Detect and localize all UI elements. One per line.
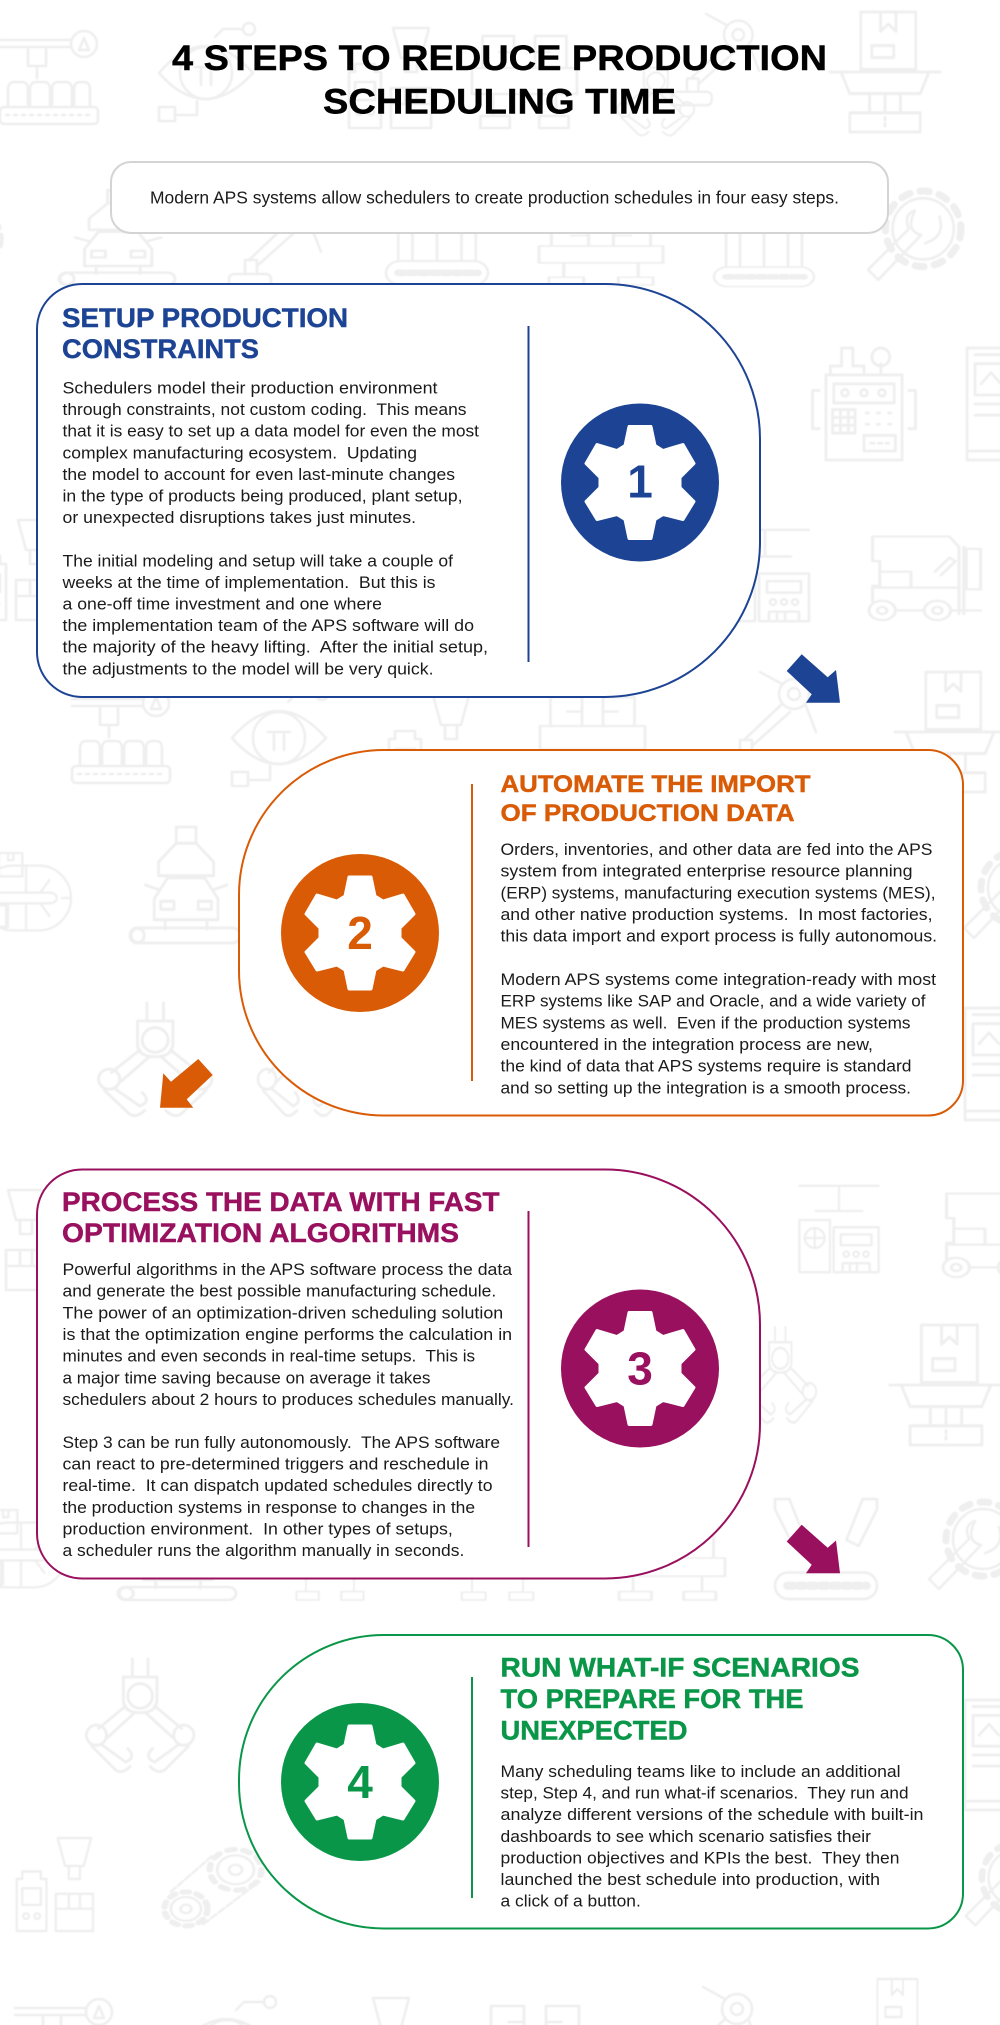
body text: step 3: is that the optimization engine performs the calculation in (62, 1326, 512, 1344)
body text: step 2: and other native production systems. In most factories, (500, 906, 932, 924)
body text: step 2 (500, 841, 937, 1097)
heading: step 1 (62, 303, 348, 364)
body text: step 1: through constraints, not custom coding. This means (62, 401, 466, 419)
icon: gear badge 3 (561, 1290, 719, 1448)
panel: step 3 process the data with fast optimization algorithms (37, 1170, 760, 1578)
body text: step 4: a click of a button. (500, 1893, 641, 1911)
body text: step 2: ERP systems like SAP and Oracle, and a wide variety of (500, 993, 926, 1011)
icon: gear badge 4: 4 (347, 1756, 373, 1808)
body text: step 3: Step 3 can be run fully autonomously. The APS software (62, 1434, 500, 1452)
body text: step 1: the implementation team of the APS software will do (62, 617, 474, 635)
arrow: step 2 to step 3 (160, 1059, 213, 1108)
divider: step 2 (471, 784, 473, 1081)
title: 4 STEPS TO REDUCE PRODUCTION (172, 39, 827, 78)
heading: step 3: PROCESS THE DATA WITH FAST (62, 1187, 500, 1217)
heading: step 1: SETUP PRODUCTION (62, 303, 348, 333)
body text: step 3: The power of an optimization-driven scheduling solution (62, 1304, 503, 1322)
body text: step 1: Schedulers model their production environment (62, 380, 438, 398)
body text: step 1: or unexpected disruptions takes just minutes. (62, 509, 416, 527)
heading: step 3: OPTIMIZATION ALGORITHMS (62, 1218, 459, 1248)
title (172, 39, 827, 122)
body text: step 1: The initial modeling and setup will take a couple of (62, 552, 453, 570)
body text: step 4: Many scheduling teams like to include an additional (500, 1763, 900, 1781)
heading: step 4: UNEXPECTED (500, 1716, 688, 1746)
body text: step 4: production objectives and KPIs the best. They then (500, 1849, 900, 1867)
body text: step 3: a major time saving because on average it takes (62, 1369, 430, 1387)
divider: step 4 (471, 1677, 473, 1898)
body text: step 4: step, Step 4, and run what-if scenarios. They run and (500, 1785, 908, 1803)
icon: gear badge 2: 2 (347, 907, 373, 959)
panel: step 4 run what-if scenarios (239, 1635, 963, 1928)
body text: step 2: and so setting up the integration is a smooth process. (500, 1079, 911, 1097)
body text: step 1: in the type of products being produced, plant setup, (62, 488, 462, 506)
body text: step 3 (62, 1261, 514, 1560)
body text: step 4: dashboards to see which scenario satisfies their (500, 1828, 872, 1846)
divider: step 3 (528, 1211, 530, 1547)
body text: step 2: the kind of data that APS systems require is standard (500, 1058, 912, 1076)
body text: step 2: (ERP) systems, manufacturing execution systems (MES), (500, 884, 936, 902)
intro callout box (111, 162, 888, 233)
title: SCHEDULING TIME (323, 82, 676, 122)
heading: step 1: CONSTRAINTS (62, 334, 259, 364)
heading: step 4: TO PREPARE FOR THE (500, 1684, 804, 1714)
arrow: step 3 to step 4 (787, 1525, 840, 1573)
heading: step 4: RUN WHAT-IF SCENARIOS (500, 1652, 860, 1682)
icon: gear badge 4 (281, 1703, 439, 1861)
body text: step 2: Orders, inventories, and other data are fed into the APS (500, 841, 932, 859)
intro callout box: Modern APS systems allow schedulers to create production schedules in four easy steps. (150, 188, 839, 208)
heading: step 2: AUTOMATE THE IMPORT (500, 771, 811, 798)
icon: gear badge 3: 3 (627, 1342, 653, 1394)
body text: step 1: that it is easy to set up a data model for even the most (62, 423, 479, 441)
body text: step 3: and generate the best possible manufacturing schedule. (62, 1283, 496, 1301)
body text: step 2: Modern APS systems come integration-ready with most (500, 971, 937, 989)
body text: step 1: the majority of the heavy lifting. After the initial setup, (62, 639, 488, 657)
body text: step 3: can react to pre-determined triggers and reschedule in (62, 1456, 489, 1474)
body text: step 2: encountered in the integration process are new, (500, 1036, 873, 1054)
body text: step 4 (500, 1763, 924, 1911)
heading: step 3 (62, 1187, 500, 1248)
body text: step 3: production environment. In other types of setups, (62, 1520, 453, 1538)
body text: step 3: schedulers about 2 hours to produces schedules manually. (62, 1391, 514, 1409)
body text: step 3: minutes and even seconds in real-time setups. This is (62, 1348, 475, 1366)
panel: step 1 setup production constraints (37, 284, 760, 697)
heading: step 4 (500, 1652, 860, 1746)
body text: step 1: the model to account for even last-minute changes (62, 466, 455, 484)
arrow: step 1 to step 2 (787, 654, 840, 703)
icon: gear badge 2 (281, 854, 439, 1012)
body text: step 3: the production systems in response to changes in the (62, 1499, 475, 1517)
body text: step 1: a one-off time investment and one where (62, 596, 382, 614)
panel: step 2 automate the import of production data (239, 750, 963, 1116)
body text: step 2: MES systems as well. Even if the production systems (500, 1014, 910, 1032)
body text: step 2: this data import and export process is fully autonomous. (500, 928, 937, 946)
icon: gear badge 1 (561, 404, 719, 562)
icon: gear badge 1: 1 (627, 456, 653, 508)
body text: step 1: complex manufacturing ecosystem. Updating (62, 444, 417, 462)
body text: step 3: a scheduler runs the algorithm manually in seconds. (62, 1542, 464, 1560)
body text: step 4: launched the best schedule into production, with (500, 1871, 880, 1889)
divider: step 1 (528, 326, 530, 662)
body text: step 2: system from integrated enterprise resource planning (500, 863, 912, 881)
body text: step 1: weeks at the time of implementation. But this is (61, 574, 436, 592)
body text: step 3: Powerful algorithms in the APS software process the data (62, 1261, 513, 1279)
body text: step 1 (61, 380, 488, 678)
body text: step 3: real-time. It can dispatch updated schedules directly to (62, 1477, 492, 1495)
body text: step 1: the adjustments to the model will be very quick. (62, 660, 434, 678)
heading: step 2 (500, 771, 811, 827)
body text: step 4: analyze different versions of the schedule with built-in (500, 1806, 924, 1824)
heading: step 2: OF PRODUCTION DATA (500, 800, 794, 827)
